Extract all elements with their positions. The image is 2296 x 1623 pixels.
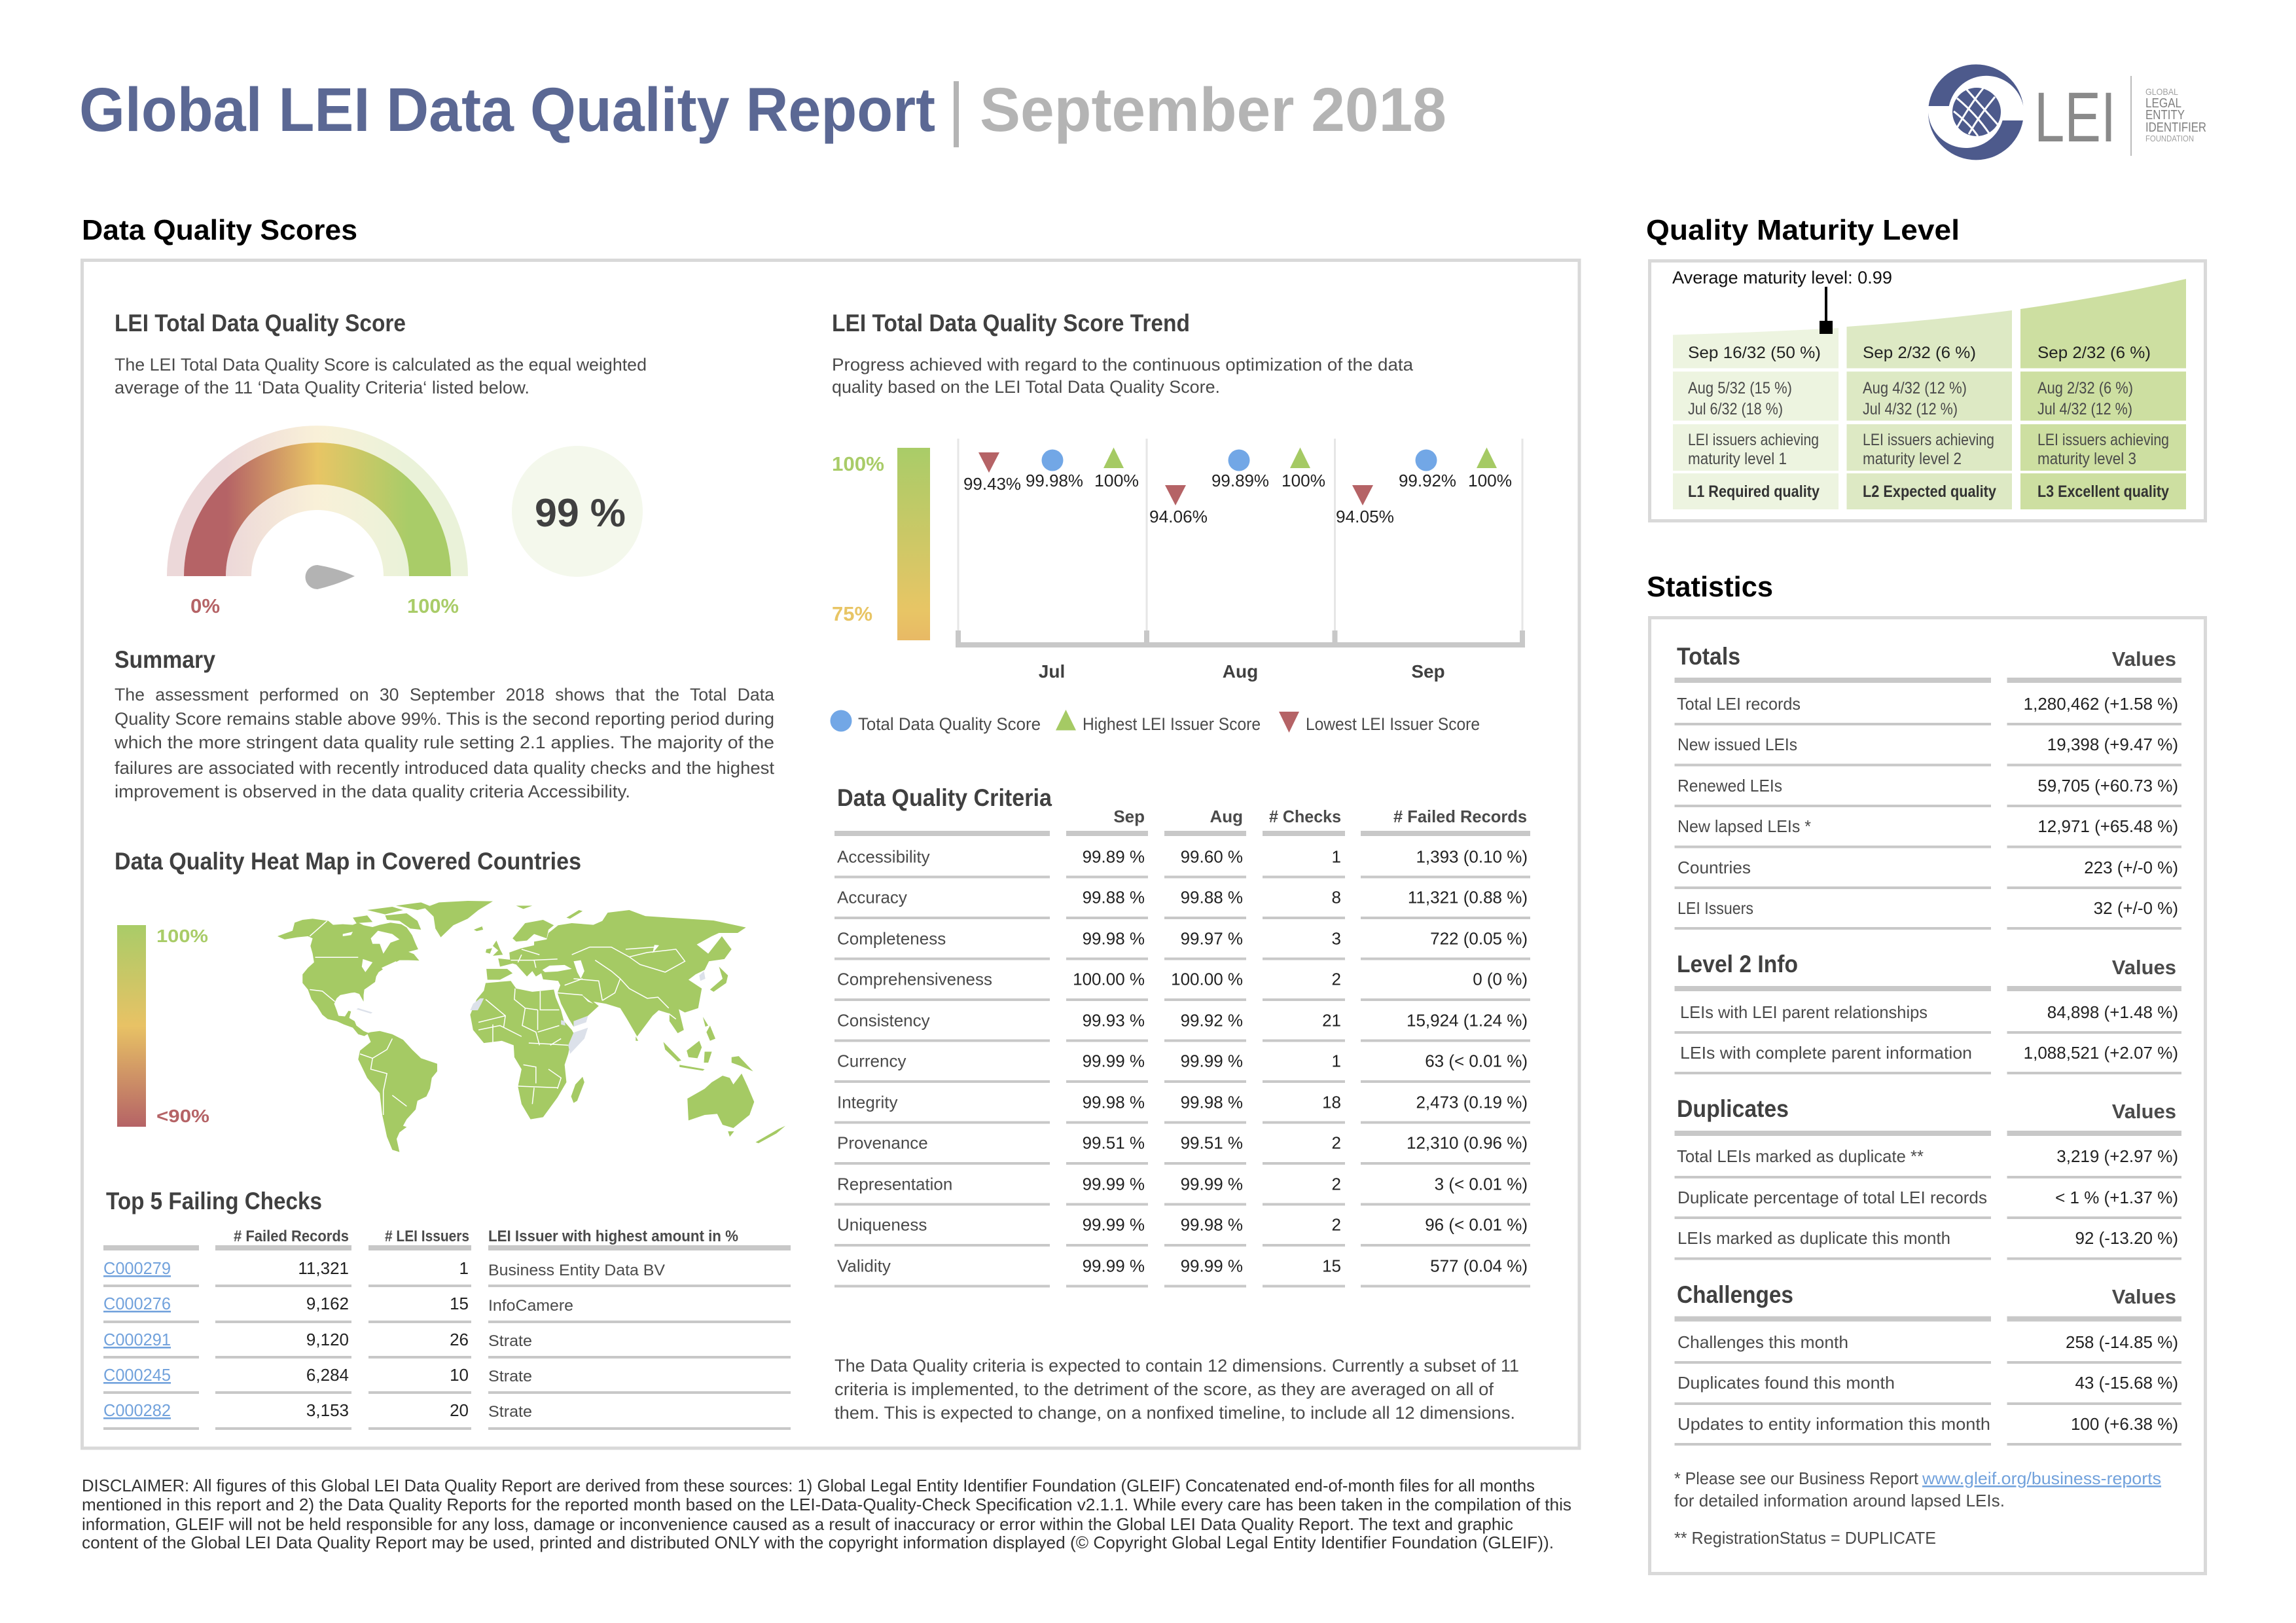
column: level 2: maturity level 2 — [1863, 450, 1962, 468]
row C000291: 9,120 — [306, 1330, 349, 1349]
section: Level 2 Info: 1,088,521 (+2.07 %) — [2024, 1043, 2178, 1063]
row Completeness: 722 (0.05 %) — [1430, 928, 1528, 948]
row Accessibility: 1 — [1332, 847, 1341, 867]
heading: Summary: Summary — [115, 646, 215, 673]
row C000282: Strate — [488, 1403, 532, 1421]
section: Challenges: Challenges this month — [1677, 1332, 1848, 1352]
row Provenance: 99.51 % — [1083, 1133, 1145, 1152]
column: level 2: Sep 2/32 (6 %) — [1863, 344, 1976, 362]
row Representation — [837, 1175, 1528, 1194]
markers: September: 100% — [1468, 471, 1512, 490]
trend chart — [832, 439, 1522, 682]
column: level 2 — [1847, 310, 2012, 509]
row C000279: Business Entity Data BV — [488, 1262, 665, 1279]
title: Global LEI Data Quality Report — [79, 75, 935, 145]
column: level 3: Sep 2/32 (6 %) — [2037, 344, 2151, 362]
text: trend description: Progress achieved with regard to the continuous optimization of the data — [832, 355, 1414, 374]
row Consistency: 21 — [1322, 1011, 1341, 1030]
row Comprehensiveness: 2 — [1332, 969, 1341, 989]
row Comprehensiveness — [837, 969, 1528, 989]
section: Challenges: 258 (-14.85 %) — [2066, 1332, 2178, 1352]
text: criteria note: The Data Quality criteria is expected to contain 12 dimensions. Currently a subset of 11 — [834, 1356, 1519, 1376]
logo: GLEIF LEI: GLOBAL — [2145, 86, 2178, 97]
section: Totals: 19,398 (+9.47 %) — [2047, 735, 2178, 754]
row Uniqueness: 2 — [1332, 1215, 1341, 1235]
text: summary: Quality Score remains stable above 99%. This is the second reporting period during — [115, 709, 774, 729]
gauge chart — [167, 426, 468, 617]
markers: July — [963, 448, 1139, 494]
heat map legend: <90% — [156, 1106, 209, 1126]
column: level 2: LEI issuers achieving — [1863, 431, 1994, 449]
logo: GLEIF LEI: LEI — [2034, 77, 2116, 156]
row Accessibility: 99.89 % — [1083, 847, 1145, 867]
column: level 1: maturity level 1 — [1688, 450, 1787, 468]
score value circle: 99 % — [535, 491, 626, 535]
section: Duplicates: Duplicates — [1677, 1095, 1789, 1122]
text: disclaimer — [82, 1476, 1571, 1552]
text: disclaimer: mentioned in this report and 2) the Data Quality Reports for the reported month based on the LEI-Data-Quality-Check Specification v2.1.1. While every care has been taken in the compilation of this — [82, 1495, 1571, 1514]
text: criteria note: criteria is implemented, to the detriment of the score, as they are averaged on all of — [834, 1379, 1494, 1399]
text: score description: average of the 11 ‘Data Quality Criteria‘ listed below. — [115, 378, 529, 397]
row C000291: C000291 — [103, 1330, 171, 1349]
row Currency: 63 (< 0.01 %) — [1425, 1051, 1528, 1071]
logo: GLEIF LEI: FOUNDATION — [2145, 134, 2194, 143]
heading: Quality Maturity Level: Quality Maturity Level — [1646, 214, 1960, 246]
row Representation: 99.99 % — [1181, 1175, 1243, 1194]
footnotes: for detailed information around lapsed LEIs. — [1674, 1491, 2005, 1510]
row Provenance: 99.51 % — [1181, 1133, 1243, 1152]
row Accessibility — [837, 847, 1528, 867]
row C000276: InfoCamere — [488, 1297, 573, 1315]
colour scale: 100% — [832, 452, 884, 475]
markers: July: 99.98% — [1026, 471, 1083, 490]
column: level 3: Aug 2/32 (6 %) — [2037, 379, 2133, 397]
column: level 3: maturity level 3 — [2037, 450, 2136, 468]
row Uniqueness: 99.99 % — [1083, 1215, 1145, 1235]
text: disclaimer: content of the Global LEI Data Quality Report may be used, printed and distributed ONLY with the copyright information displayed (© Copyright Global Legal Entity Identifier Foundation (GLEIF)). — [82, 1533, 1554, 1552]
row C000279: 11,321 — [298, 1258, 349, 1278]
trend legend — [830, 710, 1480, 734]
row Consistency: 15,924 (1.24 %) — [1407, 1011, 1528, 1030]
markers: September — [1336, 448, 1512, 526]
row C000276: 15 — [450, 1294, 469, 1313]
text: summary: failures are associated with recently introduced data quality checks and the highest — [115, 758, 775, 778]
footnotes — [1674, 1468, 2161, 1548]
table header — [234, 1228, 738, 1245]
section: Level 2 Info — [1677, 951, 2178, 1063]
table header: # Checks — [1269, 807, 1341, 826]
column: level 1: LEI issuers achieving — [1688, 431, 1819, 449]
text: score description — [115, 355, 647, 397]
gauge chart: 100% — [407, 594, 459, 617]
row C000279: C000279 — [103, 1258, 171, 1278]
footnotes: * Please see our Business Report — [1674, 1468, 1919, 1488]
row C000282: 3,153 — [306, 1400, 349, 1420]
row C000291 — [103, 1330, 532, 1350]
row Validity: 99.99 % — [1181, 1256, 1243, 1275]
row Representation: 3 (< 0.01 %) — [1435, 1175, 1528, 1194]
trend legend: Lowest LEI Issuer Score — [1306, 714, 1480, 734]
row Representation: 99.99 % — [1083, 1175, 1145, 1194]
row Completeness — [837, 928, 1528, 948]
logo: GLEIF LEI — [1928, 64, 2206, 160]
row Integrity: 18 — [1322, 1092, 1341, 1112]
table header: # Failed Records — [234, 1228, 349, 1245]
row Integrity: 99.98 % — [1083, 1092, 1145, 1112]
row C000276 — [103, 1294, 573, 1315]
row C000291: Strate — [488, 1332, 532, 1350]
section: Totals: 12,971 (+65.48 %) — [2037, 816, 2178, 836]
text: criteria note — [834, 1356, 1519, 1423]
row Provenance: 12,310 (0.96 %) — [1407, 1133, 1528, 1152]
text: summary — [114, 685, 775, 801]
markers: September: 94.05% — [1336, 507, 1394, 526]
row Currency — [837, 1051, 1528, 1071]
heading: heat map: Data Quality Heat Map in Covered Countries — [115, 848, 581, 875]
section: Totals: 223 (+/-0 %) — [2084, 858, 2178, 877]
markers: August: 94.06% — [1149, 507, 1208, 526]
section: Totals — [1677, 643, 2178, 918]
row Currency: 99.99 % — [1181, 1051, 1243, 1071]
colour scale: 75% — [832, 602, 872, 625]
text: summary: which the more stringent data quality rule setting 2.1 applies. The majority of the — [114, 733, 774, 752]
heading: LEI Total Data Quality Score: LEI Total Data Quality Score — [115, 310, 406, 337]
column: level 3: LEI issuers achieving — [2037, 431, 2169, 449]
heat map legend: 100% — [156, 926, 208, 946]
table: top 5 failing checks — [103, 1228, 791, 1434]
row Comprehensiveness: 100.00 % — [1073, 969, 1145, 989]
logo: GLEIF LEI: LEGAL — [2145, 96, 2181, 111]
column: level 1: Aug 5/32 (15 %) — [1688, 379, 1792, 397]
table header: Sep — [1113, 807, 1145, 826]
panel: statistics — [1649, 618, 2206, 1574]
row Accuracy: 99.88 % — [1181, 888, 1243, 907]
text: summary: improvement is observed in the data quality criteria Accessibility. — [115, 782, 630, 801]
row Integrity: 99.98 % — [1181, 1092, 1243, 1112]
row Currency: Currency — [837, 1051, 906, 1071]
section: Duplicates: 92 (-13.20 %) — [2075, 1228, 2178, 1248]
row Uniqueness: 96 (< 0.01 %) — [1425, 1215, 1528, 1235]
score value circle — [512, 446, 643, 577]
markers: September: 99.92% — [1399, 471, 1456, 490]
row Validity: 577 (0.04 %) — [1430, 1256, 1528, 1275]
row Accuracy — [837, 888, 1528, 907]
footnotes: www.gleif.org/business-reports — [1922, 1468, 2161, 1488]
trend legend: Total Data Quality Score — [858, 714, 1041, 734]
panel: quality maturity level — [1649, 261, 2206, 521]
markers: July: 100% — [1094, 471, 1139, 490]
markers: August: 100% — [1282, 471, 1325, 490]
section: Totals: Total LEI records — [1677, 694, 1801, 714]
section: Level 2 Info: LEIs with complete parent information — [1680, 1043, 1972, 1063]
section: Totals: LEI Issuers — [1677, 898, 1753, 918]
row C000245 — [103, 1365, 532, 1385]
row Consistency — [837, 1011, 1528, 1030]
section: Challenges — [1677, 1281, 2178, 1434]
row Provenance — [837, 1133, 1528, 1152]
section: Challenges: Values — [2112, 1285, 2176, 1308]
section: Totals: 32 (+/-0 %) — [2094, 898, 2178, 918]
row C000282: 20 — [450, 1400, 469, 1420]
column: level 3: L3 Excellent quality — [2037, 483, 2169, 501]
section: Duplicates — [1677, 1095, 2178, 1248]
row C000279 — [103, 1258, 665, 1279]
trend legend: Highest LEI Issuer Score — [1083, 714, 1261, 734]
table: data quality criteria — [834, 807, 1530, 1290]
section: Challenges: 100 (+6.38 %) — [2071, 1414, 2178, 1434]
row Consistency: Consistency — [837, 1011, 930, 1030]
panel: data quality scores — [82, 261, 1579, 1448]
footnotes: ** RegistrationStatus = DUPLICATE — [1674, 1528, 1936, 1548]
row Uniqueness: Uniqueness — [837, 1215, 927, 1235]
text: trend description — [832, 355, 1414, 397]
row Validity: 15 — [1322, 1256, 1341, 1275]
logo: GLEIF LEI: IDENTIFIER — [2145, 120, 2206, 135]
row C000282: C000282 — [103, 1400, 171, 1420]
row Uniqueness — [837, 1215, 1528, 1235]
section: Duplicates: Duplicate percentage of total LEI records — [1677, 1188, 1987, 1207]
row C000245: C000245 — [103, 1365, 171, 1385]
section: Level 2 Info: 84,898 (+1.48 %) — [2047, 1002, 2178, 1022]
row C000276: C000276 — [103, 1294, 171, 1313]
markers: August — [1149, 448, 1325, 526]
row C000282 — [103, 1400, 532, 1421]
row Completeness: 99.98 % — [1083, 928, 1145, 948]
row Validity — [837, 1256, 1528, 1275]
rules — [1674, 674, 2181, 1448]
row Validity: 99.99 % — [1083, 1256, 1145, 1275]
section: Totals: 59,705 (+60.73 %) — [2037, 776, 2178, 795]
section: Challenges: Challenges — [1677, 1281, 1793, 1308]
row Accessibility: 1,393 (0.10 %) — [1416, 847, 1528, 867]
section: Totals: Countries — [1677, 858, 1751, 877]
section: Duplicates: Values — [2112, 1100, 2176, 1123]
month labels: Aug — [1223, 661, 1258, 682]
row Representation: Representation — [837, 1175, 952, 1194]
section: Totals: Values — [2112, 647, 2176, 670]
row Completeness: 3 — [1332, 928, 1341, 948]
text: score description: The LEI Total Data Quality Score is calculated as the equal weighted — [115, 355, 647, 374]
row C000276: 9,162 — [306, 1294, 349, 1313]
month labels: Jul — [1039, 661, 1065, 682]
section: Level 2 Info: Values — [2112, 956, 2176, 979]
section: Duplicates: < 1 % (+1.37 %) — [2055, 1188, 2178, 1207]
section: Level 2 Info: LEIs with LEI parent relationships — [1680, 1002, 1928, 1022]
row Currency: 99.99 % — [1083, 1051, 1145, 1071]
row C000291: 26 — [450, 1330, 469, 1349]
table header: # LEI Issuers — [385, 1228, 469, 1245]
section: Totals: New issued LEIs — [1677, 735, 1797, 754]
section: Duplicates: LEIs marked as duplicate this month — [1677, 1228, 1950, 1248]
section: Challenges: Updates to entity information this month — [1677, 1414, 1990, 1434]
column: level 1: Jul 6/32 (18 %) — [1688, 400, 1783, 418]
section: Totals: New lapsed LEIs * — [1677, 816, 1811, 836]
title: September 2018 — [980, 75, 1446, 145]
gauge chart: 0% — [190, 594, 220, 617]
text: disclaimer: information, GLEIF will not be held responsible for any loss, damage or inconvenience caused as a result of inaccuracy or error within the Global LEI Data Quality Report. The text and graphic — [82, 1514, 1513, 1534]
world map — [278, 901, 785, 1152]
title — [79, 75, 1446, 147]
text: disclaimer: DISCLAIMER: All figures of this Global LEI Data Quality Report are derived from these sources: 1) Global Legal Entity Identifier Foundation (GLEIF) Concatenated end-of-month files for all months — [82, 1476, 1535, 1495]
table header: # Failed Records — [1393, 807, 1527, 826]
colour scale — [832, 448, 930, 640]
table rows — [837, 847, 1528, 1275]
row C000279: 1 — [459, 1258, 469, 1278]
text: summary: The assessment performed on 30 September 2018 shows that the Total Data — [115, 685, 775, 704]
section: Level 2 Info: Level 2 Info — [1677, 951, 1798, 977]
heat map legend — [117, 925, 209, 1127]
heading: score trend: LEI Total Data Quality Score Trend — [832, 310, 1190, 337]
heading: Statistics: Statistics — [1647, 571, 1773, 603]
markers: July: 99.43% — [963, 474, 1021, 494]
row Validity: Validity — [837, 1256, 891, 1275]
column: level 3: Jul 4/32 (12 %) — [2037, 400, 2132, 418]
table header — [1113, 807, 1527, 826]
row C000245: Strate — [488, 1368, 532, 1385]
text: trend description: quality based on the LEI Total Data Quality Score. — [832, 377, 1220, 397]
heading: Data Quality Criteria: Data Quality Criteria — [837, 784, 1052, 811]
column: level 2: Aug 4/32 (12 %) — [1863, 379, 1967, 397]
section: Duplicates: 3,219 (+2.97 %) — [2056, 1146, 2178, 1166]
table header: Aug — [1210, 807, 1243, 826]
logo: GLEIF LEI: ENTITY — [2145, 108, 2185, 122]
markers: August: 99.89% — [1211, 471, 1269, 490]
row Integrity: Integrity — [837, 1092, 898, 1112]
section: Challenges: Duplicates found this month — [1677, 1373, 1895, 1393]
row Consistency: 99.93 % — [1083, 1011, 1145, 1030]
row Accessibility: Accessibility — [837, 847, 930, 867]
row Uniqueness: 99.98 % — [1181, 1215, 1243, 1235]
row Accuracy: 11,321 (0.88 %) — [1408, 888, 1528, 907]
text: criteria note: them. This is expected to change, on a nonfixed timeline, to include all 12 dimensions. — [834, 1403, 1515, 1423]
row C000245: 10 — [450, 1365, 469, 1385]
column: level 2: Jul 4/32 (12 %) — [1863, 400, 1958, 418]
row Consistency: 99.92 % — [1181, 1011, 1243, 1030]
heading: Data Quality Scores: Data Quality Scores — [82, 214, 357, 246]
row Provenance: 2 — [1332, 1133, 1341, 1152]
column: level 2: L2 Expected quality — [1863, 483, 1996, 501]
column: level 1: Sep 16/32 (50 %) — [1688, 344, 1821, 362]
row Comprehensiveness: 100.00 % — [1171, 969, 1243, 989]
row Integrity: 2,473 (0.19 %) — [1416, 1092, 1528, 1112]
row Currency: 1 — [1332, 1051, 1341, 1071]
average maturity pointer — [1820, 287, 1833, 334]
row Completeness: 99.97 % — [1181, 928, 1243, 948]
column: level 3 — [2020, 279, 2186, 509]
row Accuracy: 8 — [1332, 888, 1341, 907]
section: Totals: Totals — [1677, 643, 1740, 670]
column: level 1: L1 Required quality — [1688, 483, 1820, 501]
axis — [958, 630, 1522, 645]
row Accuracy: Accuracy — [837, 888, 907, 907]
row Provenance: Provenance — [837, 1133, 928, 1152]
section: Totals: Renewed LEIs — [1677, 776, 1782, 795]
row Accessibility: 99.60 % — [1181, 847, 1243, 867]
row Representation: 2 — [1332, 1175, 1341, 1194]
row C000245: 6,284 — [306, 1365, 349, 1385]
average maturity label: Average maturity level: 0.99 — [1672, 268, 1892, 287]
section: Challenges: 43 (-15.68 %) — [2075, 1373, 2178, 1393]
heading: Top 5 Failing Checks: Top 5 Failing Checks — [106, 1188, 322, 1214]
table header: LEI Issuer with highest amount in % — [488, 1228, 738, 1245]
row Comprehensiveness: 0 (0 %) — [1473, 969, 1528, 989]
row Integrity — [837, 1092, 1528, 1112]
section: Totals: 1,280,462 (+1.58 %) — [2024, 694, 2178, 714]
month labels: Sep — [1411, 661, 1445, 682]
row Comprehensiveness: Comprehensiveness — [837, 969, 992, 989]
section: Duplicates: Total LEIs marked as duplicate ** — [1677, 1146, 1924, 1166]
column: level 1 — [1673, 328, 1839, 509]
row Completeness: Completeness — [837, 928, 946, 948]
row Accuracy: 99.88 % — [1083, 888, 1145, 907]
month labels — [1039, 661, 1445, 682]
